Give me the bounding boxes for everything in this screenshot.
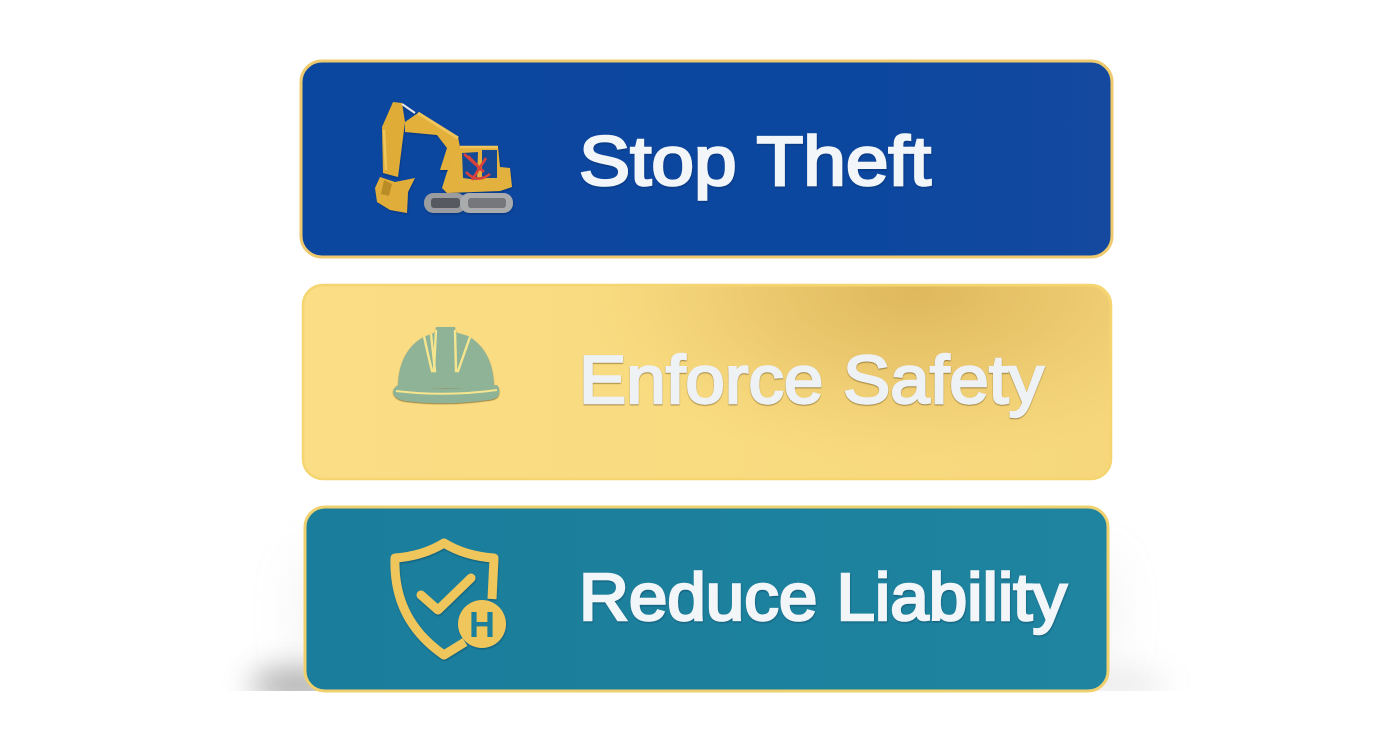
panel background: teal [305,507,1108,691]
shield outline [395,543,494,655]
panel: stop theft [301,61,1112,257]
excavator cab with red mark [442,147,512,193]
heading: reduce liability: Reduce Liability [579,560,1068,635]
icon: excavator [375,102,513,213]
excavator tracks [424,193,513,213]
ground shadow [240,642,1154,691]
heading: enforce safety: Enforce Safety [579,342,1044,418]
icon: shield with check and H badge [395,543,506,655]
check mark [421,578,471,610]
H badge: H [469,604,495,645]
panel background: gold [303,285,1111,479]
panel: reduce liability [305,507,1108,691]
excavator arm and bucket [375,102,460,213]
panel background: blue [301,61,1112,257]
icon: hard hat [393,327,499,403]
heading: stop theft: Stop Theft [579,122,931,200]
panel: enforce safety [303,285,1111,479]
